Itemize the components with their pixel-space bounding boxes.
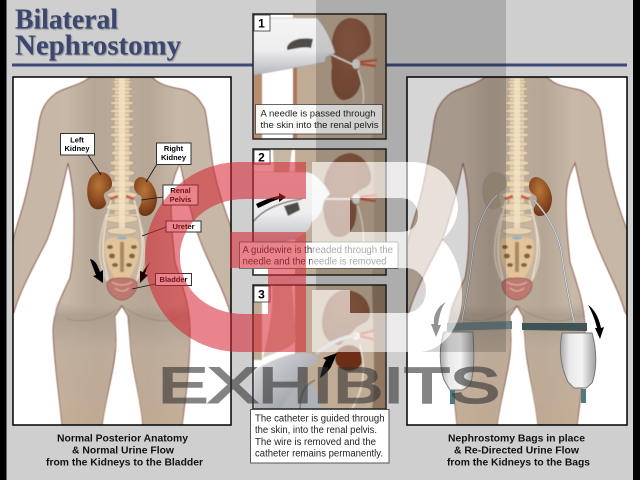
- caption: step 3: The wire is removed and the: [255, 437, 377, 448]
- label: renal pelvis: [163, 185, 198, 205]
- title rule: [12, 64, 627, 66]
- label: bladder: Bladder: [160, 275, 188, 284]
- caption: step 3: The catheter is guided through: [255, 414, 384, 424]
- icon: flow arrow left: [90, 259, 103, 283]
- skin: [292, 14, 375, 138]
- left black edge: [0, 0, 6, 480]
- caption: step 3: catheter remains permanently.: [255, 448, 383, 460]
- left strap: [447, 321, 512, 331]
- label: left kidney: Left: [70, 136, 84, 144]
- gloved hand: [253, 172, 330, 246]
- kidney: [331, 18, 371, 100]
- caption: bags: from the Kidneys to the Bags: [447, 458, 590, 468]
- number 2: 2: [258, 150, 265, 164]
- right valve: [581, 389, 586, 403]
- icon: left kidney: [87, 172, 112, 209]
- figure: body with kidneys and spine: [10, 77, 234, 426]
- spine: [372, 285, 386, 409]
- spine: [372, 149, 386, 275]
- renal pelvis: [352, 332, 360, 340]
- drainage tubes: [461, 195, 575, 326]
- arrow: left flow: [431, 302, 446, 337]
- caption: step 3: the skin, into the renal pelvis.: [255, 425, 377, 436]
- caption: step 1: the skin into the renal pelvis: [260, 120, 379, 131]
- gloved hand: [253, 18, 335, 75]
- right black edge: [633, 0, 640, 480]
- label: left kidney: [60, 134, 94, 155]
- caption: step 2: A guidewire is threaded through the: [242, 245, 393, 256]
- caption: bags: & Re-Directed Urine Flow: [454, 446, 579, 456]
- label: right kidney: Kidney: [161, 153, 187, 162]
- leader lines: [88, 155, 166, 289]
- title: Bilateral: [15, 4, 118, 36]
- icon: faded left kidney: [482, 172, 507, 209]
- icon: flow arrow right: [140, 261, 152, 283]
- label: renal pelvis: Pelvis: [170, 195, 191, 204]
- caption: step 1: [256, 104, 382, 134]
- figure: body with spine: [405, 77, 629, 426]
- grip shadow: [287, 38, 313, 50]
- panel: step 1: [253, 14, 386, 139]
- panel: normal posterior anatomy: [10, 77, 234, 426]
- label: renal pelvis: Renal: [170, 186, 191, 195]
- caption: normal anatomy: from the Kidneys to the Bladder: [46, 458, 203, 468]
- catheter: [316, 335, 356, 354]
- panel: nephrostomy bags: [405, 77, 629, 426]
- number 3: 3: [258, 288, 265, 302]
- kidney: [323, 153, 371, 237]
- caption: step 2: [240, 242, 398, 268]
- right strap: [522, 323, 587, 331]
- left valve: [450, 390, 455, 404]
- spine: [372, 14, 386, 139]
- skin: [294, 286, 375, 408]
- caption: step 2: needle and the needle is removed: [242, 256, 386, 268]
- label: left kidney: Kidney: [64, 144, 90, 153]
- needle: [322, 198, 354, 200]
- kidney lower: [335, 345, 363, 371]
- panel: step 2: [253, 149, 386, 275]
- right bag: [560, 333, 596, 388]
- caption: step 1: A needle is passed through: [260, 108, 376, 120]
- renal pelvis: [352, 194, 360, 204]
- watermark: red G letter: [145, 162, 306, 352]
- caption: bags: Nephrostomy Bags in place: [448, 434, 585, 444]
- caption: bags: [447, 434, 590, 468]
- caption: step 3: [250, 410, 389, 463]
- skin: [294, 150, 375, 274]
- label: right kidney: Right: [164, 144, 184, 153]
- caption: normal anatomy: Normal Posterior Anatomy: [57, 434, 188, 444]
- watermark: EXHIBITS wordmark: EXHIBITS: [158, 358, 500, 414]
- icon: right kidney: [134, 177, 157, 216]
- label: bladder: [156, 274, 192, 286]
- number 1: 1: [258, 16, 265, 30]
- label: ureter: [166, 221, 201, 232]
- watermark: white B letter: [312, 162, 462, 352]
- label: right kidney: [156, 143, 191, 164]
- kidney upper: [322, 290, 370, 345]
- arrow: right flow: [588, 305, 604, 339]
- title: [15, 4, 181, 62]
- grip shadow: [284, 202, 300, 216]
- label: ureter: Ureter: [172, 222, 195, 231]
- caption: normal anatomy: & Normal Urine Flow: [72, 446, 174, 456]
- left bag: [440, 332, 474, 390]
- icon: right kidney: [529, 177, 552, 216]
- renal pelvis: [352, 59, 360, 69]
- arrow: guidewire direction: [256, 193, 286, 208]
- caption: normal anatomy: [46, 434, 203, 468]
- needle: [330, 54, 354, 65]
- guidewire: [253, 199, 302, 222]
- gloved hand: [254, 353, 318, 409]
- title: Nephrostomy: [15, 30, 181, 62]
- panel: step 3: [253, 285, 386, 409]
- watermark: grey backdrop: [316, 0, 506, 352]
- arrow: catheter direction: [320, 353, 337, 378]
